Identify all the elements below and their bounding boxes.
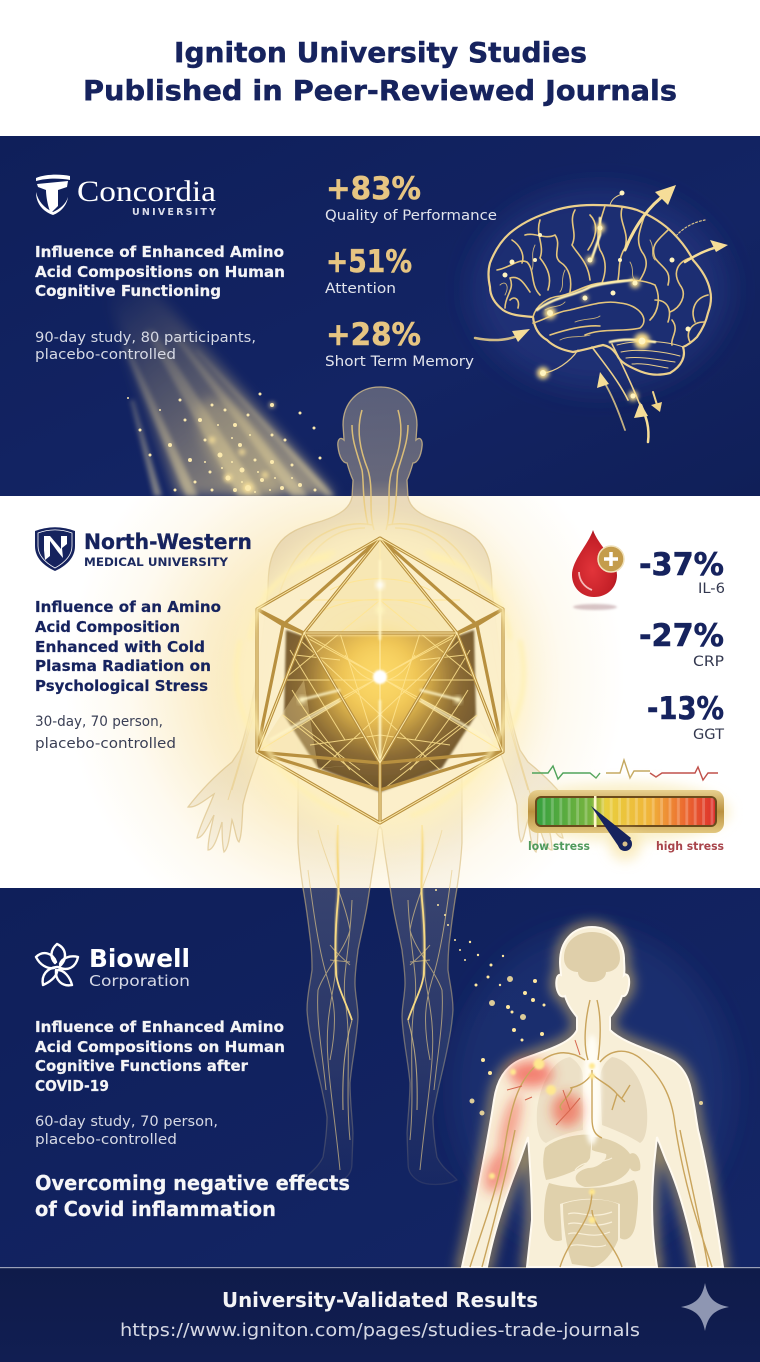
body glow [462, 927, 723, 1267]
study title: Psychological Stress [35, 677, 208, 695]
stress gauge [520, 760, 730, 861]
key message: Overcoming negative effects [35, 1171, 350, 1195]
study title: Plasma Radiation on [35, 657, 211, 675]
golden sparkles [435, 889, 703, 1116]
study details: placebo-controlled [35, 1132, 177, 1148]
panel text: Biowell [35, 944, 350, 1221]
white glow around polyhedron [235, 520, 525, 840]
stat: quality of performance: +83% [326, 171, 421, 207]
inflammation nerves [507, 1040, 580, 1125]
stat: attention [325, 244, 412, 297]
arrows [625, 194, 666, 250]
study details: 60-day study, 70 person, [35, 1114, 218, 1130]
stat: short term memory: +28% [326, 317, 421, 353]
energy aura [236, 552, 524, 816]
key message: of Covid inflammation [35, 1197, 276, 1221]
glowing nodes [537, 223, 650, 401]
stat: short term memory [325, 317, 474, 370]
study title: Acid Compositions on Human [35, 1038, 285, 1056]
key message [35, 1171, 350, 1221]
stat: quality of performance: Quality of Performance [325, 208, 497, 224]
study title: Cognitive Functions after [35, 1057, 249, 1075]
panel: North-Western background [0, 496, 760, 888]
organ details [568, 1158, 612, 1247]
glowing nodes [489, 1058, 596, 1224]
study details [35, 1114, 218, 1148]
North-Western wordmark: North-Western [84, 530, 252, 554]
pulse lines [532, 760, 718, 780]
title band [0, 0, 760, 136]
stat: IL-6: IL-6 [698, 581, 725, 597]
stat: GGT [647, 691, 724, 743]
study title [35, 1018, 285, 1095]
study details: placebo-controlled [35, 736, 176, 752]
stat: IL-6: -37% [639, 547, 724, 583]
dark inner core [284, 630, 476, 792]
red inflammation [479, 1061, 582, 1196]
stat: CRP: -27% [639, 618, 724, 654]
anatomical torso figure [452, 927, 732, 1267]
panel text: North-Western: MEDICAL UNIVERSITY [84, 555, 229, 569]
brainstem [592, 344, 640, 405]
gauge labels: low stress [528, 839, 590, 853]
panel text: North-Western [35, 527, 252, 752]
stat: CRP [639, 618, 724, 670]
stress gauge: high stress [656, 839, 724, 853]
study title: Influence of Enhanced Amino [35, 1018, 284, 1036]
bright star rays [270, 560, 490, 760]
gyri lines [497, 206, 708, 345]
stat: CRP: CRP [693, 654, 724, 670]
background halo [456, 940, 728, 1220]
panel text: Concordia [35, 175, 285, 363]
thin internal rays [257, 579, 503, 792]
stat: short term memory: Short Term Memory [325, 354, 474, 370]
logo: Concordia shield [36, 175, 70, 215]
title: Published in Peer-Reviewed Journals [83, 75, 677, 107]
title [83, 37, 677, 107]
study title: Enhanced with Cold [35, 638, 205, 656]
study title: COVID-19 [35, 1077, 109, 1095]
stats: North-Western results [639, 547, 725, 743]
gold frame edges [257, 538, 503, 823]
study title [35, 243, 285, 300]
study details: 90-day study, 80 participants, [35, 330, 256, 346]
central human figure [188, 387, 572, 1184]
brain and organs [537, 932, 647, 1267]
stat: attention: Attention [325, 281, 396, 297]
footer url: https://www.igniton.com/pages/studies-trade-journals [120, 1320, 640, 1341]
title: Igniton University Studies [174, 37, 587, 69]
study title: Influence of Enhanced Amino [35, 243, 284, 261]
Concordia wordmark: Concordia [77, 175, 216, 208]
light beam with sparkles [116, 290, 339, 496]
study details [35, 330, 256, 363]
cerebellum folds [617, 341, 683, 368]
panel text: Concordia: UNIVERSITY [132, 207, 216, 218]
nerves [470, 1000, 712, 1267]
glowing polyhedron [236, 538, 524, 823]
stat: quality of performance [325, 171, 497, 224]
stat: GGT: GGT [693, 727, 724, 743]
logo: North-Western shield [35, 527, 75, 571]
stat: attention: +51% [326, 244, 412, 280]
panel text: Biowell: Corporation [89, 972, 190, 990]
stats: Concordia results [325, 171, 497, 370]
panel: Biowell background [0, 888, 760, 1268]
panel: Concordia background [0, 136, 760, 496]
footer [120, 1283, 729, 1341]
icon: four-point star [681, 1283, 729, 1331]
study title: Cognitive Functioning [35, 282, 221, 300]
study details: 30-day, 70 person, [35, 714, 163, 730]
study title: Acid Compositions on Human [35, 263, 285, 281]
center glow [583, 1035, 601, 1145]
study details: placebo-controlled [35, 347, 176, 363]
stat: GGT: -13% [647, 691, 724, 727]
study title: Influence of an Amino [35, 598, 221, 616]
needle [591, 806, 641, 861]
icon: blood drop [572, 530, 624, 610]
study title [35, 598, 221, 695]
logo: Biowell pinwheel star [36, 944, 78, 985]
brain illustration [472, 185, 728, 442]
brain outline [488, 205, 711, 375]
body silhouette [462, 927, 723, 1267]
study title: Acid Composition [35, 618, 180, 636]
footer heading: University-Validated Results [222, 1288, 538, 1312]
study details [35, 714, 176, 752]
Biowell wordmark: Biowell [89, 944, 190, 973]
footer background [0, 1267, 760, 1362]
